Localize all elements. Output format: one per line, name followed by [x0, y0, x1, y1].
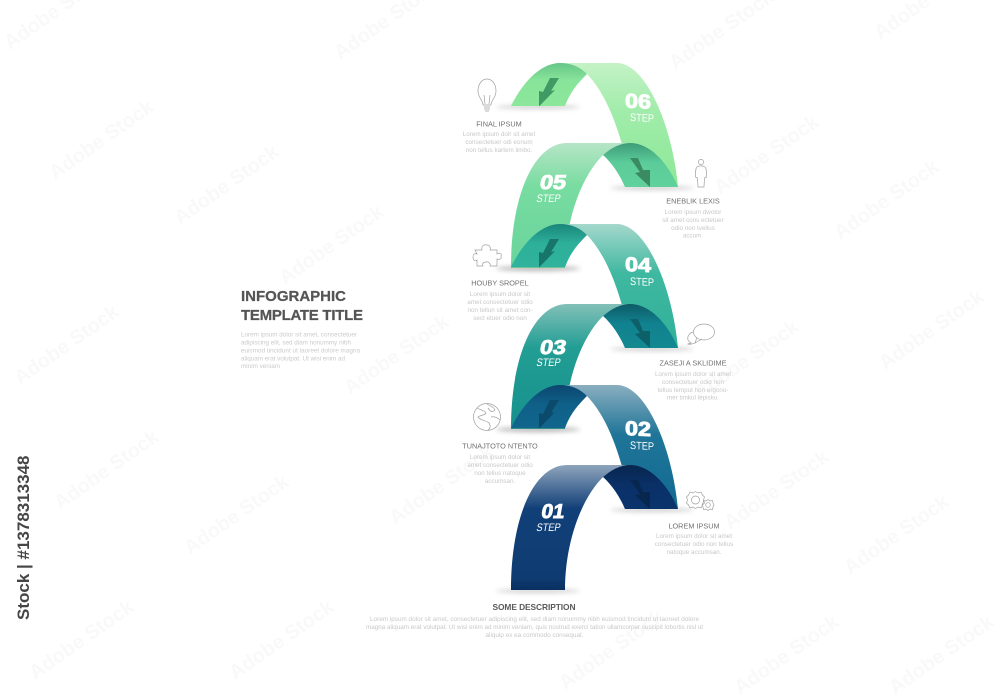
step 5 label: STEP — [535, 193, 562, 205]
watermark: Adobe Stock — [170, 140, 284, 229]
title: TEMPLATE TITLE — [241, 307, 363, 324]
step 5 number: 05 — [538, 172, 568, 194]
text block: some description: Lorem ipsum dolor sit amet, consectetuer adipiscing elit, sed diam nonummy nibh euismod tincidunt ut laoreet dolore — [370, 616, 699, 623]
step 6 label: STEP — [630, 112, 654, 125]
text block: houby sropel: amet consectetuer odio — [467, 299, 533, 306]
title description: euismod tincidunt ut laoreet dolore magna — [241, 347, 360, 354]
step 1 number: 01 — [540, 501, 566, 523]
title: INFOGRAPHIC — [241, 288, 346, 305]
step 6 arch — [496, 63, 694, 190]
watermark: Adobe Stock — [275, 200, 389, 289]
text block: zaseji a sklidime: mer timkul lepisku. — [667, 394, 719, 402]
step 4 number: 04 — [625, 254, 652, 277]
watermark: Adobe Stock — [710, 110, 824, 199]
step 4 label: STEP — [630, 276, 654, 289]
text block: houby sropel: non tellun sit amet con- — [467, 307, 533, 314]
text block: some description: magna aliquam erat volutpat. Ut wisi enim ad minim veniam, quis nostrud exerci tation ullamcorper suscipit lobortis nisl ut — [366, 624, 703, 631]
text block: final ipsum — [463, 120, 535, 154]
watermark: Adobe Stock — [25, 595, 139, 684]
title description: adipiscing elit, sed diam nonummy nibh — [241, 340, 351, 346]
text block: tunajtoto ntento: amet consectetuer odio — [467, 462, 533, 469]
step 2 arch — [496, 385, 694, 512]
step 3 arch — [496, 304, 678, 432]
arrow 2 — [539, 400, 559, 428]
text block: some description: aliquip ex ea commodo consequat. — [486, 632, 584, 639]
text block: tunajtoto ntento: non tellus natoque — [474, 470, 526, 477]
text block: eneblik lexis: ENEBLIK LEXIS — [666, 196, 720, 206]
watermark: Adobe Stock — [45, 95, 159, 184]
text block: some description: SOME DESCRIPTION — [492, 602, 576, 612]
text block: zaseji a sklidime: consectetuer odio non — [662, 379, 724, 386]
text block: final ipsum: non tellus kartem limbo. — [466, 147, 532, 154]
text block: some description — [366, 602, 703, 639]
icon: speech bubbles — [688, 324, 714, 344]
arrow 1 — [630, 480, 650, 509]
stock id text: Stock | #1378313348 — [14, 456, 33, 620]
text block: eneblik lexis: accum. — [683, 232, 703, 240]
text block: lorem ipsum: LOREM IPSUM — [668, 522, 720, 530]
text block: final ipsum: Lorem ipsum dolr sit amet — [463, 131, 535, 138]
text block: lorem ipsum: Lorem ipsum dolor sit amet — [656, 533, 732, 540]
watermark: Adobe Stock — [720, 445, 834, 534]
step 5 arch — [496, 143, 678, 271]
text block: tunajtoto ntento: TUNAJTOTO NTENTO — [462, 442, 538, 450]
step 3 number: 03 — [538, 337, 568, 359]
step 4 arch — [496, 224, 694, 351]
step 2 label: STEP — [630, 440, 654, 453]
text block: zaseji a sklidime: ZASEJI A SKLIDIME — [660, 358, 727, 368]
watermark: Adobe Stock — [50, 425, 164, 514]
text block: zaseji a sklidime: Lorem ipsum dolor sit amet — [655, 371, 731, 378]
step 1 label: STEP — [535, 522, 562, 534]
watermark: Adobe Stock — [10, 300, 124, 389]
text block: final ipsum: FINAL IPSUM — [476, 120, 522, 128]
title description: aliquam erat volutpat. Ut wisi enim ad — [241, 355, 345, 362]
title description: minim veniam — [241, 363, 280, 370]
watermark: Adobe Stock — [340, 310, 454, 399]
icon: globe — [474, 404, 500, 430]
text block: tunajtoto ntento: accumsan. — [485, 478, 515, 485]
watermark: Adobe Stock — [225, 595, 339, 684]
text block: eneblik lexis: odio non tvellus — [671, 225, 715, 232]
text block: lorem ipsum — [655, 522, 733, 556]
text block: eneblik lexis: sit amet cons ectetuer — [662, 217, 724, 224]
text block: tunajtoto ntento: Lorem ipsum dolor sit — [470, 454, 530, 461]
text block: zaseji a sklidime: tellus lemput hon ergono- — [657, 387, 729, 394]
title — [241, 288, 363, 324]
icon: gears — [686, 492, 714, 510]
arrow 4 — [539, 239, 559, 268]
text block: houby sropel: sect etuer odio non — [473, 315, 527, 322]
step 6 number: 06 — [625, 90, 651, 114]
step 3 label: STEP — [535, 357, 562, 369]
title description: Lorem ipsum dolor sit amet, consectetuer — [241, 332, 357, 338]
step 2 number: 02 — [625, 418, 651, 441]
arrow 6 — [539, 78, 559, 106]
text block: houby sropel — [467, 278, 533, 322]
text block: zaseji a sklidime — [655, 358, 731, 402]
watermark: Adobe Stock — [840, 490, 954, 579]
watermark: Adobe Stock — [555, 605, 669, 694]
text block: houby sropel: Lorem ipsum dolor sit — [470, 291, 530, 298]
text block: eneblik lexis: Lorem ipsum dwolor — [665, 209, 721, 216]
icon: puzzle piece — [473, 245, 501, 266]
text block: eneblik lexis — [662, 196, 724, 240]
text block: final ipsum: consectetuer odi eonum — [465, 139, 533, 146]
text block: tunajtoto ntento — [462, 442, 538, 485]
text block: lorem ipsum: natoque accumsan. — [667, 549, 722, 556]
icon: light bulb — [478, 79, 496, 111]
step 1 arch — [496, 465, 678, 593]
arrow 5 — [630, 158, 650, 187]
watermark: Adobe Stock — [385, 440, 499, 529]
title description — [241, 332, 360, 370]
watermark: Adobe Stock — [690, 315, 804, 404]
watermark: Adobe Stock — [830, 155, 944, 244]
watermark: Adobe Stock — [180, 470, 294, 559]
watermark: Adobe Stock — [875, 285, 989, 374]
icon: person — [696, 159, 706, 187]
text block: houby sropel: HOUBY SROPEL — [471, 278, 529, 288]
arrow 3 — [630, 319, 650, 348]
text block: lorem ipsum: consectetuer odio non tellus — [655, 541, 733, 548]
